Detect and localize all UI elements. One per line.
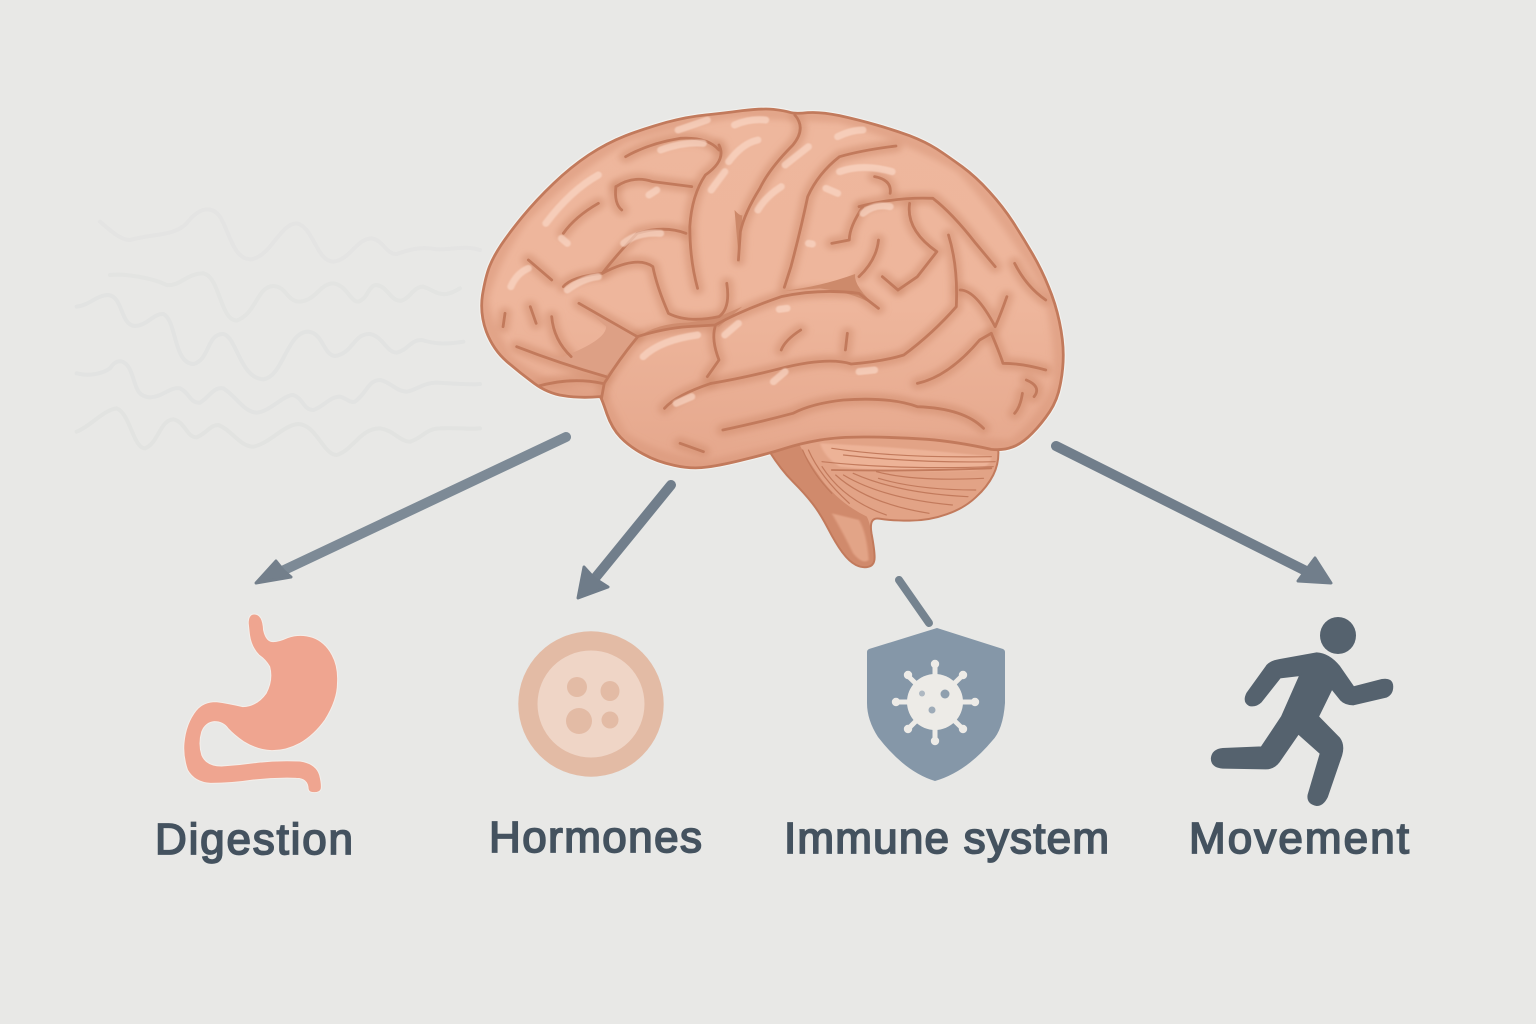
dark wedges xyxy=(788,274,868,301)
cerebellum and brain stem xyxy=(770,433,998,567)
virus xyxy=(892,660,979,745)
infographic canvas xyxy=(158,106,1410,864)
arrow to digestion xyxy=(256,437,566,583)
brain illustration xyxy=(482,109,1063,567)
arrow to movement xyxy=(1056,446,1331,583)
label: Hormones: Hormones xyxy=(489,813,702,862)
faint brain wave lines xyxy=(77,209,480,455)
cerebrum xyxy=(482,109,1063,468)
icon: running figure xyxy=(1212,617,1392,805)
label: Digestion: Digestion xyxy=(155,815,353,864)
label: Movement: Movement xyxy=(1189,814,1409,863)
gyrus highlights xyxy=(511,120,892,403)
soft gyrus shading xyxy=(503,115,1046,452)
arrow to hormones xyxy=(578,485,671,598)
label: Immune system: Immune system xyxy=(784,814,1109,863)
icon: hormone cell xyxy=(518,631,664,777)
icon: stomach xyxy=(184,614,338,793)
cortical sulci xyxy=(503,115,1046,452)
line to immune system xyxy=(899,580,929,623)
icon: immune shield with virus xyxy=(867,628,1005,781)
